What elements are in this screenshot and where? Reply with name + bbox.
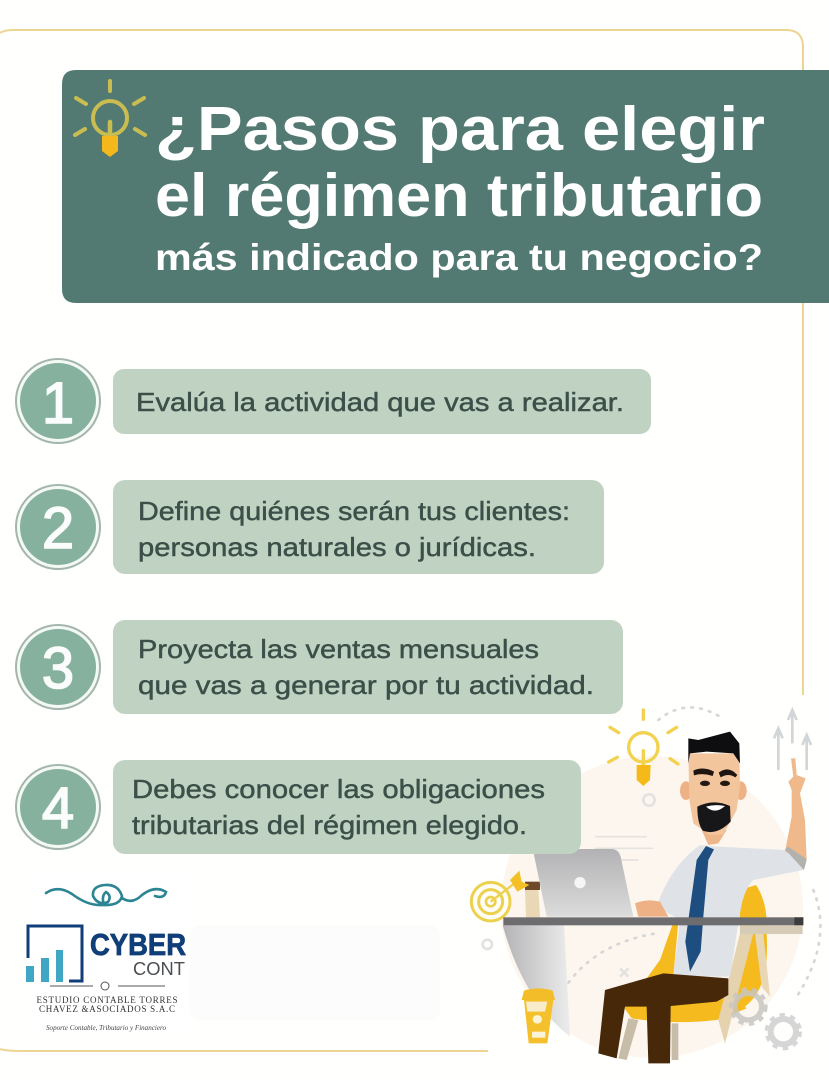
step 1 badge xyxy=(16,359,100,443)
step 4 badge xyxy=(16,765,100,849)
step 4 pill xyxy=(113,760,581,854)
step 1 badge: 1 xyxy=(42,371,74,436)
header banner xyxy=(62,70,829,303)
illustration background circle xyxy=(501,756,803,1058)
step 3 badge: 3 xyxy=(42,636,74,701)
step 4 pill: tributarias del régimen elegido. xyxy=(132,810,527,840)
icon: gears xyxy=(731,989,800,1048)
ornament xyxy=(46,885,166,905)
step 4 badge: 4 xyxy=(42,776,74,841)
chart square mark xyxy=(26,926,82,982)
tagline: Soporte Contable, Tributario y Financiero xyxy=(46,1024,166,1032)
title: el régimen tributario xyxy=(155,162,763,229)
step 1 pill xyxy=(113,369,651,434)
icon: takeaway cup xyxy=(522,988,555,1043)
step 3 pill: Proyecta las ventas mensuales xyxy=(138,634,539,664)
raised arm xyxy=(785,758,807,860)
icon: light bulb xyxy=(75,81,145,157)
title: ¿Pasos para elegir xyxy=(155,95,765,164)
step 1 pill: Evalúa la actividad que vas a realizar. xyxy=(136,387,624,417)
faint ghost smudge xyxy=(190,925,440,1020)
title xyxy=(155,95,765,278)
chair xyxy=(618,885,770,1060)
step 2 pill xyxy=(113,480,604,574)
title: más indicado para tu negocio? xyxy=(155,237,763,278)
icon: growth arrows xyxy=(774,710,811,770)
icon: coffee cup on desk xyxy=(525,890,540,917)
step 2 badge xyxy=(16,485,100,569)
brand name: CYBER xyxy=(90,927,186,962)
step 2 xyxy=(16,480,604,574)
laptop xyxy=(534,849,633,917)
icon: small gears and marks xyxy=(483,794,732,977)
trousers xyxy=(598,973,728,1063)
step 2 pill: Define quiénes serán tus clientes: xyxy=(138,496,570,526)
step 3 pill: que vas a generar por tu actividad. xyxy=(138,670,594,700)
shirt xyxy=(657,845,807,977)
firm name: ESTUDIO CONTABLE TORRES xyxy=(36,995,178,1005)
neck and head xyxy=(680,732,747,845)
step 2 badge: 2 xyxy=(42,496,74,561)
icon: target xyxy=(471,871,529,921)
step 1 xyxy=(16,359,651,443)
illustration: businessman at desk xyxy=(471,707,820,1063)
tie xyxy=(685,846,714,972)
desk xyxy=(503,917,803,934)
step 3 xyxy=(16,620,623,714)
step 3 pill xyxy=(113,620,623,714)
dotted arcs xyxy=(563,707,820,997)
divider xyxy=(50,985,165,987)
logo: Cyber Cont xyxy=(25,870,187,1033)
step 4 pill: Debes conocer las obligaciones xyxy=(132,774,545,804)
step 4 xyxy=(16,760,581,854)
logo: Cyber Cont: CHAVEZ &ASOCIADOS S.A.C xyxy=(39,1004,175,1014)
icon: idea bulb xyxy=(609,710,678,786)
step 3 badge xyxy=(16,625,100,709)
hand on laptop xyxy=(635,900,668,917)
logo: Cyber Cont: CONT xyxy=(133,959,185,979)
under-desk panel xyxy=(503,925,570,1037)
step 2 pill: personas naturales o jurídicas. xyxy=(138,532,536,562)
